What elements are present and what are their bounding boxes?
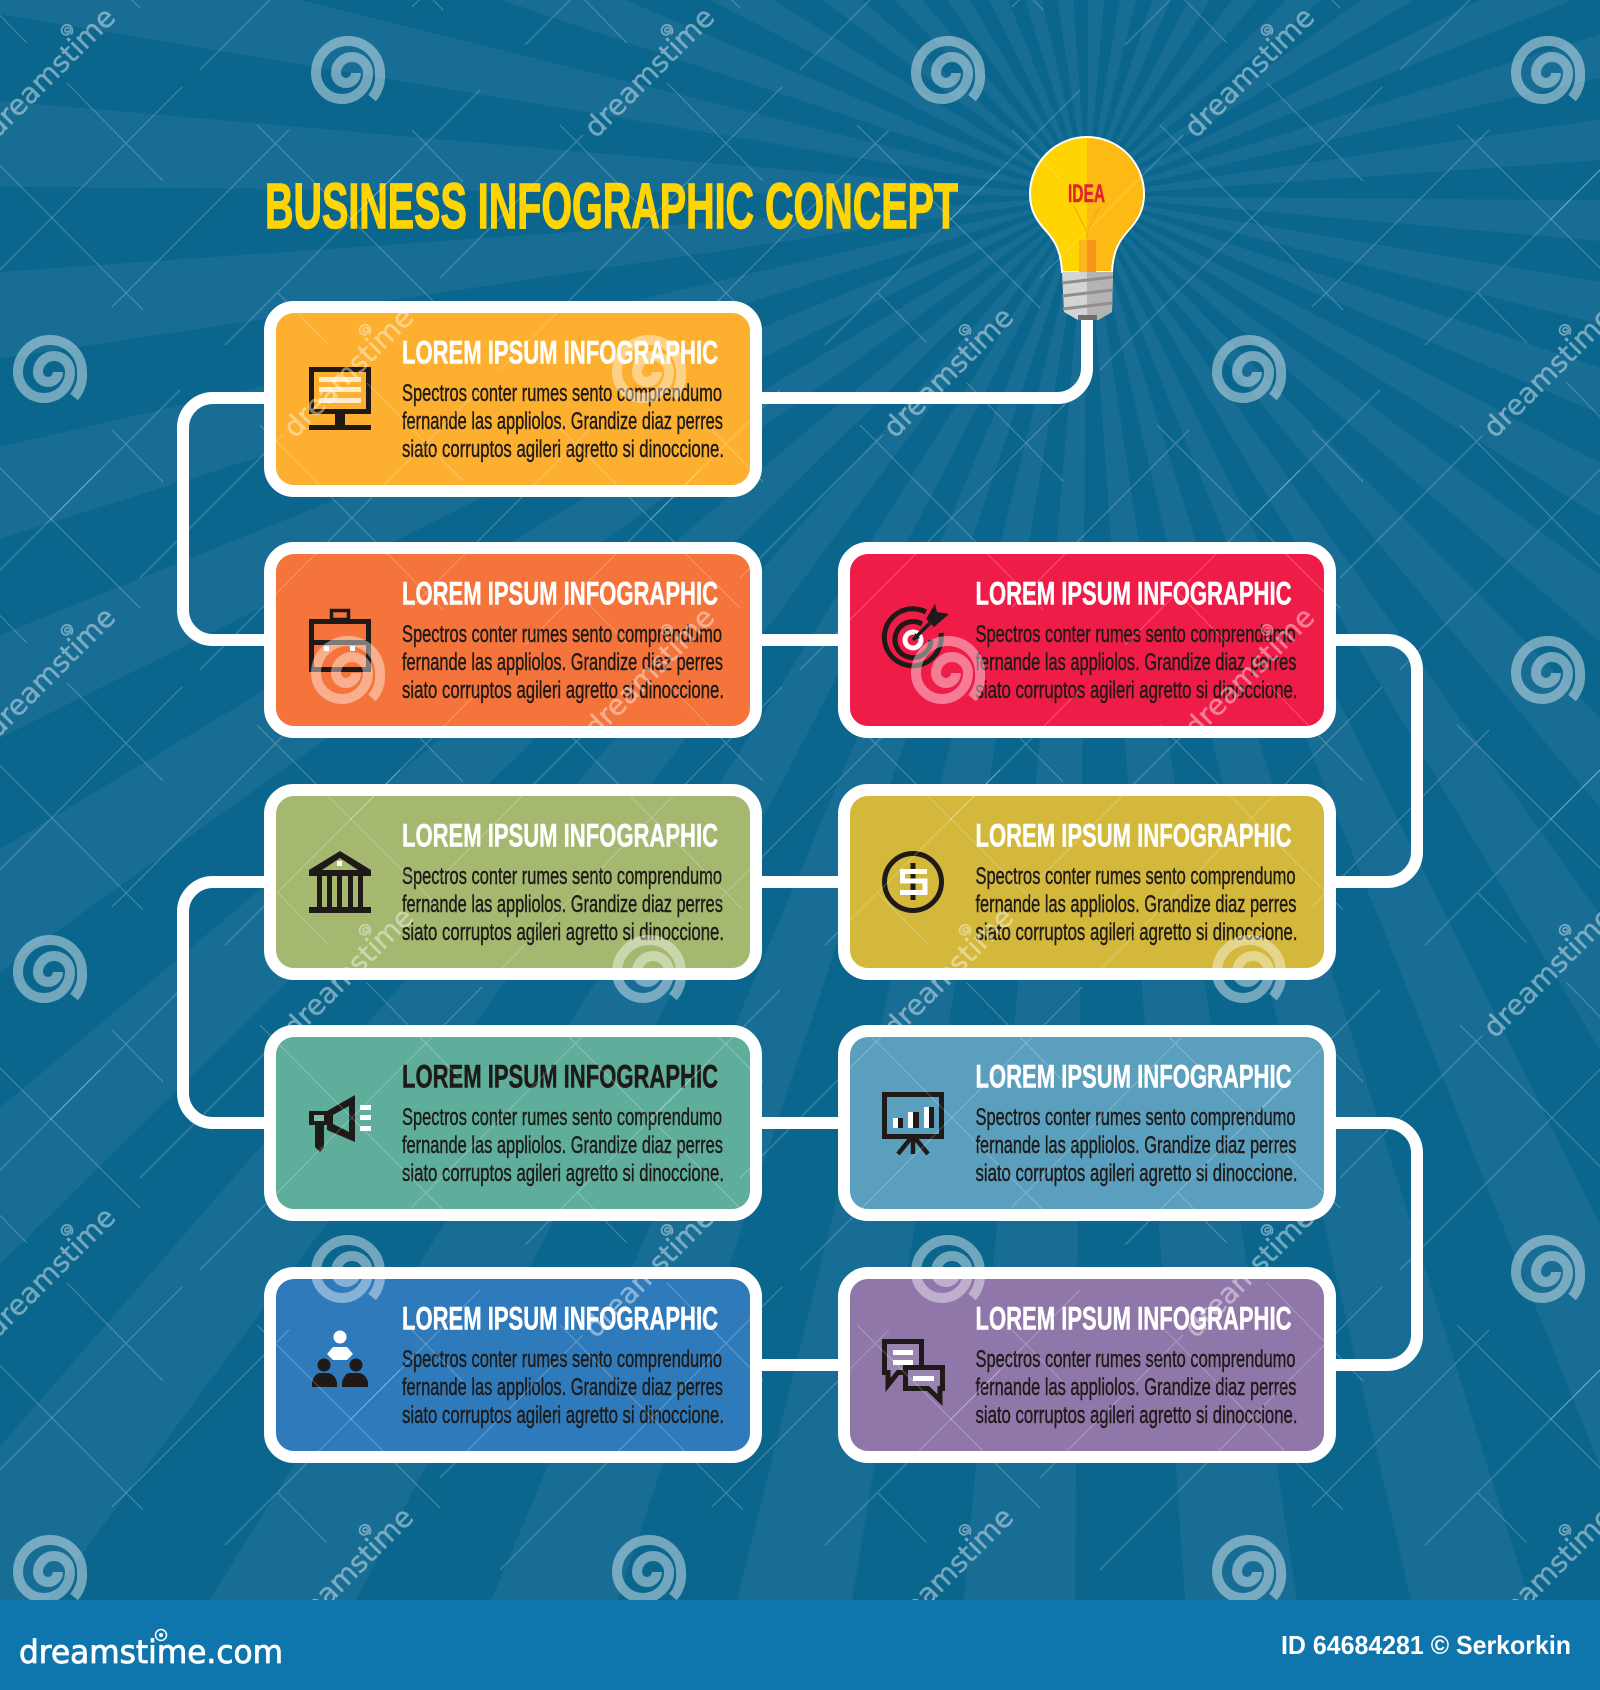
body text: Spectros conter rumes sento comprendumo: [976, 1104, 1296, 1131]
icon: bank building: [309, 851, 371, 913]
icon: briefcase: [309, 610, 371, 670]
body text: Spectros conter rumes sento comprendumo: [976, 621, 1296, 648]
panel: green card, row 3 left: [270, 790, 756, 974]
body text: siato corruptos agileri agretto si dinoccione.: [976, 919, 1298, 946]
body text: [976, 1346, 1298, 1429]
panel: light blue card, row 4 right: [844, 1031, 1330, 1215]
body text: [402, 621, 724, 704]
body text: fernande las appliolos. Grandize diaz perres: [976, 649, 1296, 676]
footer credit: ID 64684281 © Serkorkin: [1281, 1630, 1571, 1660]
watermark overlay: line segments, spirals and dreamstime text: dreamstime: [1178, 601, 1321, 744]
watermark overlay: line segments, spirals and dreamstime text: dreamstime: [277, 301, 420, 444]
body text: [402, 1346, 724, 1429]
body text: Spectros conter rumes sento comprendumo: [402, 621, 722, 648]
heading: LOREM IPSUM INFOGRAPHIC: [402, 1058, 718, 1094]
watermark overlay: line segments, spirals and dreamstime text: dreamstime: [877, 301, 1020, 444]
footer bar: [0, 1600, 1600, 1690]
body text: Spectros conter rumes sento comprendumo: [402, 1346, 722, 1373]
body text: [402, 380, 724, 463]
body text: siato corruptos agileri agretto si dinoccione.: [402, 436, 724, 463]
panel: orange card, row 1 left: [270, 307, 756, 491]
body text: Spectros conter rumes sento comprendumo: [976, 863, 1296, 890]
icon: target with arrow: [884, 604, 949, 666]
heading: LOREM IPSUM INFOGRAPHIC: [402, 818, 718, 854]
title: BUSINESS INFOGRAPHIC CONCEPT: [265, 170, 958, 242]
body text: siato corruptos agileri agretto si dinoccione.: [402, 677, 724, 704]
body text: fernande las appliolos. Grandize diaz perres: [976, 1374, 1296, 1401]
watermark overlay: line segments, spirals and dreamstime text: dreamstime: [277, 1501, 420, 1644]
body text: fernande las appliolos. Grandize diaz perres: [402, 891, 723, 918]
body text: Spectros conter rumes sento comprendumo: [402, 863, 722, 890]
watermark overlay: line segments, spirals and dreamstime text: dreamstime: [277, 901, 420, 1044]
icon: idea light bulb: IDEA: [1068, 180, 1105, 208]
body text: fernande las appliolos. Grandize diaz perres: [976, 1132, 1296, 1159]
watermark overlay: line segments, spirals and dreamstime text: dreamstime: [877, 901, 1020, 1044]
watermark overlay: line segments, spirals and dreamstime text: dreamstime: [877, 1501, 1020, 1644]
connector line: bulb to first card and all links between cards: [183, 318, 1417, 1365]
panel: gold card, row 3 right: [844, 790, 1330, 974]
icon: group of people: [312, 1330, 368, 1387]
heading: LOREM IPSUM INFOGRAPHIC: [402, 334, 718, 370]
body text: siato corruptos agileri agretto si dinoccione.: [402, 919, 724, 946]
body text: Spectros conter rumes sento comprendumo: [402, 1104, 722, 1131]
body text: fernande las appliolos. Grandize diaz perres: [402, 649, 723, 676]
icon: presentation board with bars: [884, 1094, 942, 1154]
watermark overlay: line segments, spirals and dreamstime text: dreamstime: [1178, 1201, 1321, 1344]
body text: [976, 1104, 1298, 1187]
heading: LOREM IPSUM INFOGRAPHIC: [976, 576, 1292, 612]
body text: siato corruptos agileri agretto si dinoccione.: [402, 1160, 724, 1187]
icon: chat bubbles: [884, 1342, 942, 1400]
body text: siato corruptos agileri agretto si dinoccione.: [976, 677, 1298, 704]
body text: siato corruptos agileri agretto si dinoccione.: [402, 1402, 724, 1429]
panel: blue card, row 5 left: [270, 1273, 756, 1457]
heading: LOREM IPSUM INFOGRAPHIC: [976, 1300, 1292, 1336]
body text: siato corruptos agileri agretto si dinoccione.: [976, 1160, 1298, 1187]
icon: computer monitor: [309, 370, 371, 430]
body text: [402, 1104, 724, 1187]
body text: Spectros conter rumes sento comprendumo: [402, 380, 722, 407]
body text: fernande las appliolos. Grandize diaz perres: [402, 1374, 723, 1401]
heading: LOREM IPSUM INFOGRAPHIC: [976, 818, 1292, 854]
body text: fernande las appliolos. Grandize diaz perres: [976, 891, 1296, 918]
panel: purple card, row 5 right: [844, 1273, 1330, 1457]
icon: idea light bulb: [1030, 137, 1144, 320]
panel: teal card, row 4 left: [270, 1031, 756, 1215]
body text: fernande las appliolos. Grandize diaz perres: [402, 1132, 723, 1159]
footer logo: dreamstime.com: dreamstime.com: [19, 1633, 283, 1671]
heading: LOREM IPSUM INFOGRAPHIC: [402, 576, 718, 612]
heading: LOREM IPSUM INFOGRAPHIC: [976, 1058, 1292, 1094]
heading: LOREM IPSUM INFOGRAPHIC: [402, 1300, 718, 1336]
body text: Spectros conter rumes sento comprendumo: [976, 1346, 1296, 1373]
watermark overlay: line segments, spirals and dreamstime text: dreamstime: [578, 601, 721, 744]
body text: [402, 863, 724, 946]
body text: fernande las appliolos. Grandize diaz perres: [402, 408, 723, 435]
body text: siato corruptos agileri agretto si dinoccione.: [976, 1402, 1298, 1429]
body text: [976, 863, 1298, 946]
watermark overlay: line segments, spirals and dreamstime text: dreamstime: [1178, 1, 1321, 144]
watermark overlay: line segments, spirals and dreamstime text: dreamstime: [578, 1201, 721, 1344]
panel: deep orange card, row 2 left: [270, 548, 756, 732]
watermark overlay: line segments, spirals and dreamstime text: dreamstime: [578, 1, 721, 144]
panel: red card, row 2 right: [844, 548, 1330, 732]
icon: dollar coin: [884, 854, 942, 910]
body text: [976, 621, 1298, 704]
icon: megaphone: [309, 1095, 371, 1152]
